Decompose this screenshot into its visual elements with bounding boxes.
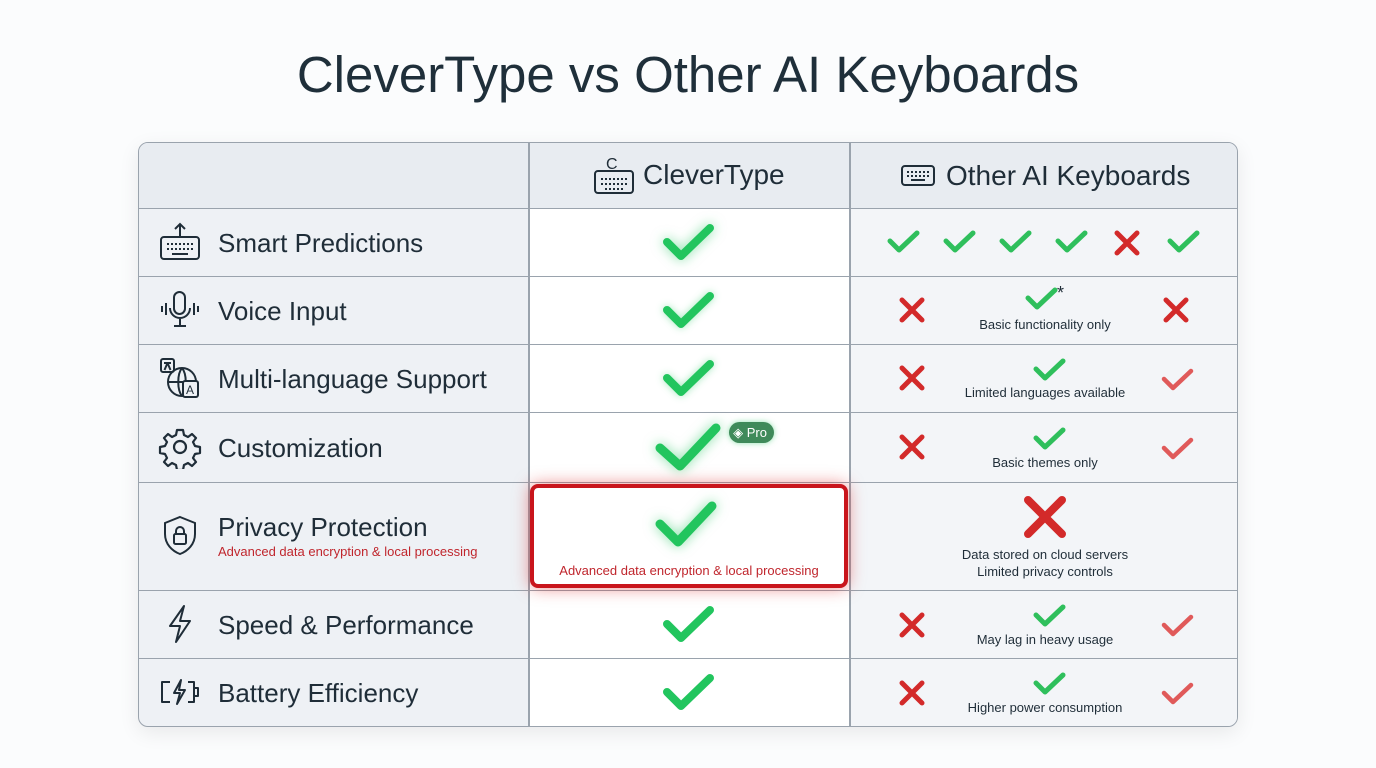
title: CleverType vs Other AI Keyboards [297, 46, 1079, 103]
icon: gear [158, 428, 202, 469]
header: CleverType: C [606, 156, 618, 173]
Other: row 5 privacy [1024, 496, 1066, 538]
icon: battery [161, 679, 199, 705]
header: CleverType [594, 156, 785, 194]
label: Privacy Protection [218, 512, 477, 559]
Other: row 3 [900, 366, 924, 390]
text: Basic themes only [992, 455, 1098, 470]
text: Data stored on cloud servers [962, 547, 1128, 562]
label: Privacy Protection: Privacy Protection [218, 512, 428, 542]
Other: row 4 [900, 434, 924, 460]
header: CleverType: CleverType [643, 159, 785, 190]
label: Speed & Performance: Speed & Performance [218, 610, 474, 640]
text: Limited languages available [965, 385, 1125, 400]
Other: row 1 marks [888, 230, 1200, 256]
label: Multi-language Support: Multi-language Support [218, 364, 487, 394]
label: Customization: Customization [218, 433, 383, 463]
highlighted privacy cell: Advanced data encryption & local processing [559, 563, 819, 578]
label: Voice Input: Voice Input [218, 296, 347, 326]
comparison table [138, 142, 1238, 727]
text: Basic functionality only [979, 317, 1111, 332]
check with Pro badge [650, 418, 778, 477]
badge: Pro [729, 422, 774, 443]
text: Limited privacy controls [977, 564, 1113, 579]
Other: row 2 [900, 298, 924, 322]
icon: lightning [169, 605, 191, 643]
icon: language globe [160, 358, 199, 398]
label: Battery Efficiency: Battery Efficiency [218, 678, 418, 708]
badge: Pro: ◈ Pro [733, 425, 767, 440]
icon: language globe: A [186, 383, 194, 397]
Other: row 6 [900, 612, 924, 638]
text: Higher power consumption [968, 700, 1122, 715]
label: Smart Predictions: Smart Predictions [218, 228, 423, 258]
icon: shield lock [164, 516, 196, 556]
CleverType checks [657, 218, 720, 266]
icon: microphone [161, 291, 199, 327]
label: Privacy Protection: Advanced data encryption & local processing [218, 544, 477, 559]
header: Other AI Keyboards: Other AI Keyboards [946, 160, 1190, 191]
icon: keyboard upload [160, 222, 200, 260]
Other: row 7 [900, 680, 924, 706]
highlighted privacy cell [530, 484, 848, 588]
text: May lag in heavy usage [977, 632, 1113, 647]
